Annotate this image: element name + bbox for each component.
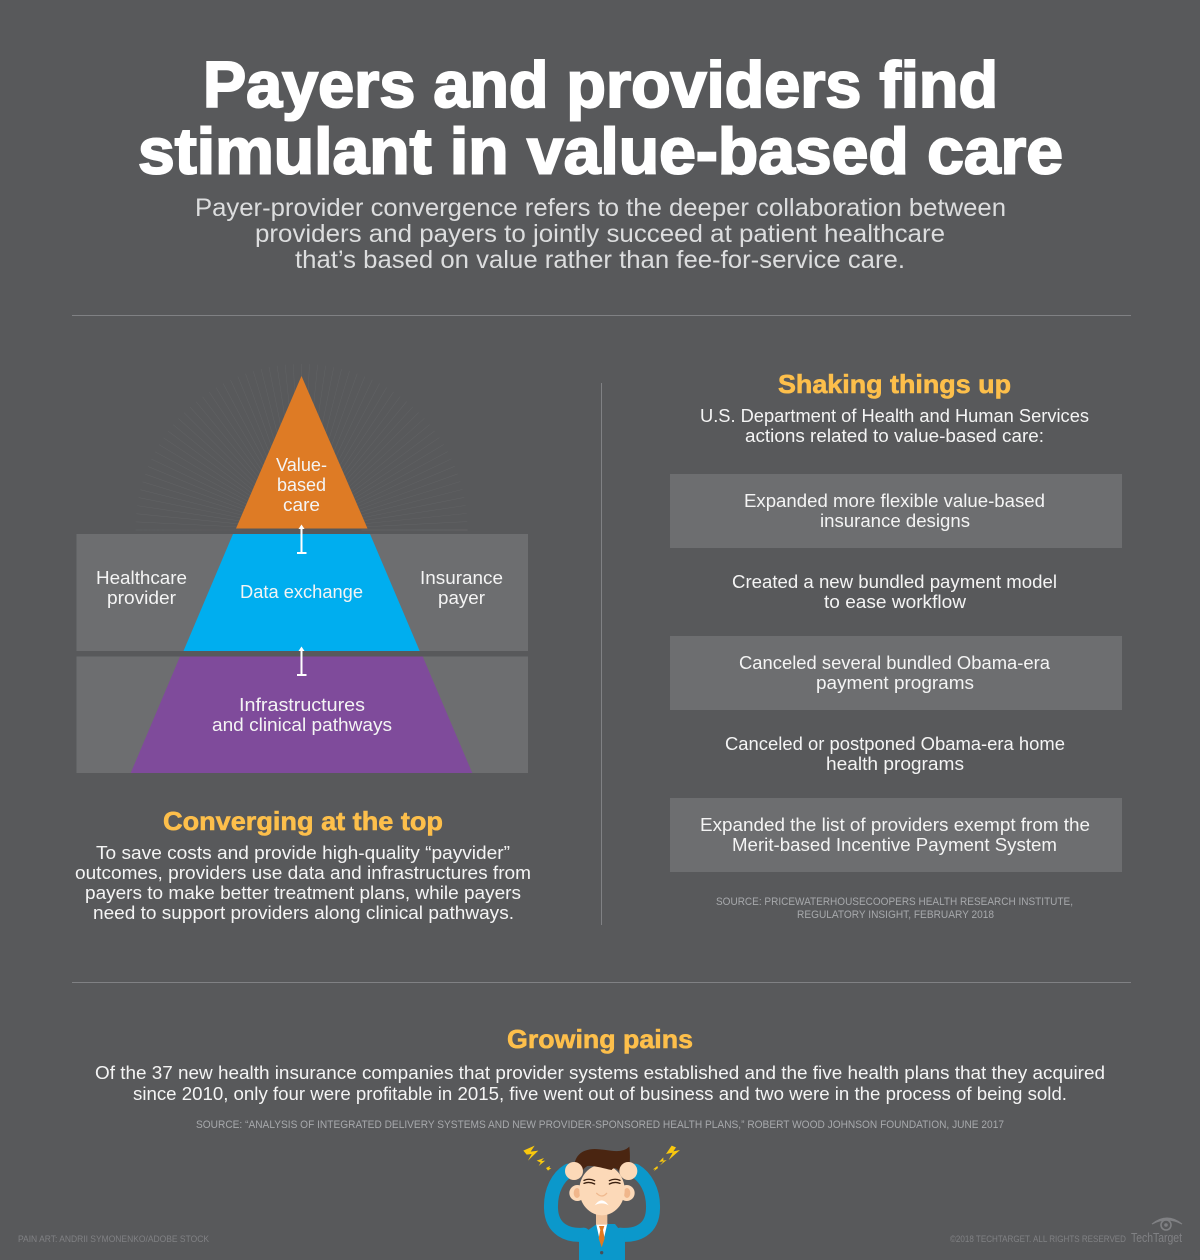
list item 3: payment programs — [816, 673, 974, 693]
title: stimulant in value-based care — [138, 114, 1063, 188]
pyramid tier: value-based care — [236, 376, 368, 528]
label: value-based care: Value- — [276, 455, 327, 475]
arms — [551, 1171, 653, 1235]
label: healthcare provider: Healthcare — [96, 568, 187, 588]
text block: converging description — [75, 843, 531, 923]
pyramid tier: infrastructures — [131, 656, 472, 773]
text block: HHS intro — [700, 406, 1089, 446]
list item 3: Canceled several bundled Obama-era — [739, 653, 1051, 673]
label: insurance payer: payer — [438, 588, 485, 608]
logo: TechTarget: TechTarget — [1131, 1230, 1182, 1245]
subtitle: that’s based on value rather than fee-for-service care. — [295, 246, 905, 274]
mouth — [595, 1200, 609, 1205]
subtitle: Payer-provider convergence refers to the deeper collaboration between — [195, 194, 1006, 222]
logo: TechTarget — [1131, 1218, 1182, 1245]
hands — [565, 1162, 637, 1180]
text block: converging description: need to support providers along clinical pathways. — [93, 903, 514, 923]
heading: growing pains: Growing pains — [507, 1024, 693, 1054]
subtitle: providers and payers to jointly succeed at patient healthcare — [255, 220, 945, 248]
list item 3 — [670, 636, 1122, 710]
heading: shaking things up: Shaking things up — [778, 369, 1011, 399]
title — [138, 48, 1063, 188]
text block: HHS intro: U.S. Department of Health and Human Services — [700, 406, 1089, 426]
credit: pain art: PAIN ART: ANDRII SYMONENKO/ADOBE STOCK — [18, 1234, 209, 1244]
label: value-based care — [276, 455, 327, 515]
panel: pyramid diagram — [76, 376, 528, 773]
lightning right — [653, 1146, 680, 1171]
text block: growing pains description: since 2010, only four were profitable in 2015, five went out of business and two were in the process of being sold. — [133, 1084, 1067, 1104]
band: infrastructure — [76, 656, 528, 773]
heading: converging at the top: Converging at the top — [163, 806, 443, 836]
list item 5 — [670, 798, 1122, 872]
source note: right panel — [716, 896, 1073, 921]
list item 2: to ease workflow — [824, 592, 967, 612]
head — [579, 1165, 625, 1215]
lightning left — [523, 1146, 551, 1171]
subtitle — [195, 194, 1006, 274]
sunburst rays — [188, 417, 414, 643]
source note: right panel: SOURCE: PRICEWATERHOUSECOOPERS HEALTH RESEARCH INSTITUTE, — [716, 896, 1073, 908]
text block: growing pains description — [95, 1063, 1105, 1104]
label: insurance payer — [420, 568, 503, 608]
label: infrastructures and clinical pathways — [212, 695, 392, 735]
text block: growing pains description: Of the 37 new health insurance companies that provider systems established and the five health plans that they acquired — [95, 1063, 1105, 1083]
ears — [569, 1185, 635, 1201]
label: value-based care: care — [283, 495, 320, 515]
label: infrastructures and clinical pathways: Infrastructures — [239, 695, 365, 715]
arrow: infrastructures to data exchange — [297, 646, 306, 676]
text block: converging description: To save costs and provide high-quality “payvider” — [96, 843, 510, 863]
list item 4: Canceled or postponed Obama-era home — [725, 734, 1065, 754]
neck — [596, 1213, 607, 1225]
list item 1: insurance designs — [820, 511, 970, 531]
list item 5: Expanded the list of providers exempt from the — [700, 815, 1090, 835]
text block: HHS intro: actions related to value-based care: — [745, 426, 1044, 446]
list item 1 — [670, 474, 1122, 548]
list item 4 — [725, 734, 1065, 774]
face features — [584, 1179, 620, 1196]
label: healthcare provider: provider — [107, 588, 176, 608]
list item 2 — [732, 572, 1057, 612]
label: healthcare provider — [96, 568, 187, 608]
list item 1: Expanded more flexible value-based — [744, 491, 1045, 511]
label: infrastructures and clinical pathways: and clinical pathways — [212, 715, 392, 735]
label: insurance payer: Insurance — [420, 568, 503, 588]
band: provider and payer — [76, 534, 528, 651]
source note: right panel: REGULATORY INSIGHT, FEBRUARY 2018 — [797, 909, 994, 921]
list item 2: Created a new bundled payment model — [732, 572, 1057, 592]
source note: growing pains: SOURCE: “ANALYSIS OF INTEGRATED DELIVERY SYSTEMS AND NEW PROVIDER-SPONSORED HEALTH PLANS,” ROBERT WOOD JOHNSON FOUNDATION, JUNE 2017 — [196, 1119, 1004, 1131]
jacket — [579, 1224, 625, 1260]
label: value-based care: based — [277, 475, 326, 495]
pyramid tier: data exchange — [184, 534, 420, 651]
list item 4: health programs — [826, 754, 964, 774]
text block: converging description: outcomes, providers use data and infrastructures from — [75, 863, 531, 883]
text block: converging description: payers to make better treatment plans, while payers — [85, 883, 521, 903]
hair — [574, 1147, 630, 1180]
shirt and tie — [596, 1223, 607, 1254]
icon: stressed man holding head — [523, 1146, 680, 1260]
list item 5: Merit-based Incentive Payment System — [732, 835, 1057, 855]
arrow: data exchange to value-based care — [297, 524, 306, 554]
credit: copyright: ©2018 TECHTARGET. ALL RIGHTS RESERVED — [950, 1234, 1126, 1244]
label: data exchange: Data exchange — [240, 582, 363, 602]
title: Payers and providers find — [203, 48, 998, 121]
